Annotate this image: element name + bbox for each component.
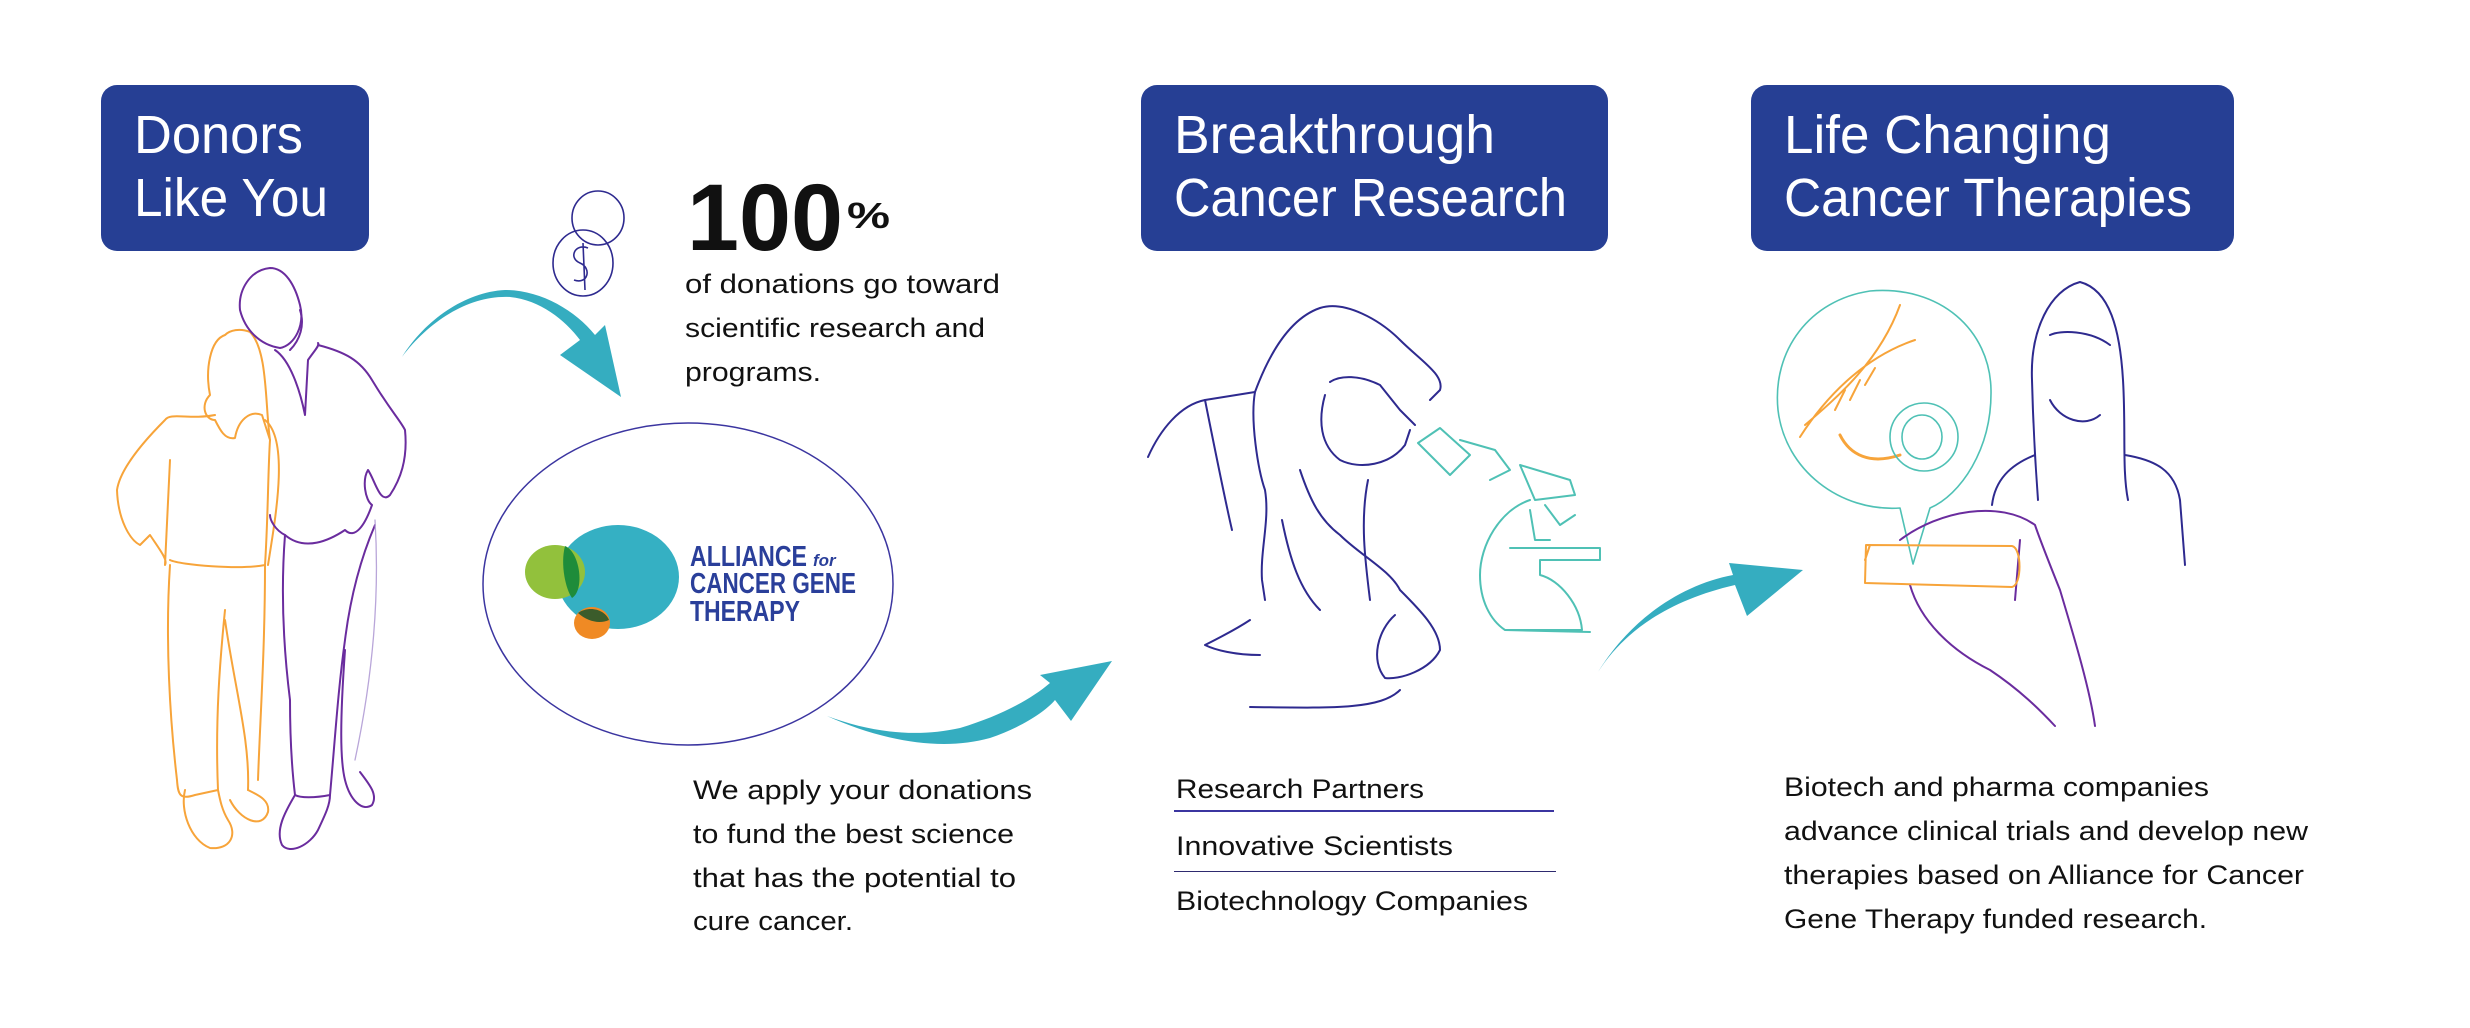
text: apply donations: cure cancer.: [693, 906, 853, 936]
heading: Life Changing Cancer Therapies: Life Changing: [1784, 105, 2111, 165]
heading: Breakthrough Cancer Research: [1141, 85, 1608, 251]
heading: Donors Like You: [101, 85, 369, 251]
arrow: research to therapies: [1598, 563, 1803, 672]
text: 100% description: scientific research and: [685, 313, 985, 343]
text: therapies description: therapies based on Alliance for Cancer: [1784, 860, 2304, 890]
heading: Donors Like You: Like You: [134, 168, 328, 228]
logo circle: Alliance for Cancer Gene Therapy: [483, 423, 893, 745]
stat: 100%: 100: [687, 165, 843, 271]
speech bubble: [1777, 290, 1991, 564]
logo text: ALLIANCE: [690, 541, 807, 573]
list: research partners: Innovative Scientists: [1176, 831, 1453, 861]
heading: Life Changing Cancer Therapies: Cancer Therapies: [1784, 168, 2192, 228]
heading: Breakthrough Cancer Research: Breakthrough: [1174, 105, 1495, 165]
text: apply donations: We apply your donations: [693, 775, 1032, 805]
text: therapies description: Gene Therapy funded research.: [1784, 904, 2207, 934]
arrow: donors to Alliance: [402, 290, 621, 397]
heading: Breakthrough Cancer Research: Cancer Research: [1174, 168, 1567, 228]
list: research partners: [1174, 774, 1556, 916]
illustration: scientist with microscope: [1148, 306, 1600, 708]
text: apply donations: [693, 775, 1032, 936]
text: therapies description: Biotech and pharma companies: [1784, 772, 2209, 802]
text: 100% description: of donations go toward: [685, 269, 1000, 299]
text: apply donations: that has the potential to: [693, 863, 1016, 893]
logo text: CANCER GENE: [690, 568, 856, 600]
list: research partners: Biotechnology Companies: [1176, 886, 1528, 916]
logo text: THERAPY: [690, 596, 800, 628]
text: therapies description: advance clinical trials and develop new: [1784, 816, 2309, 846]
illustration: donors couple: [117, 268, 406, 849]
test tube: [1865, 545, 2020, 587]
text: 100% description: [685, 269, 1000, 387]
text: therapies description: [1784, 772, 2309, 934]
text: 100% description: programs.: [685, 357, 821, 387]
list: research partners: Research Partners: [1176, 774, 1424, 804]
logo mark: [525, 525, 679, 639]
arrow: Alliance to research: [827, 661, 1112, 744]
stat: 100%: %: [847, 195, 890, 236]
icon: coins: [553, 191, 624, 296]
woman: [1992, 282, 2185, 565]
logo text: for: [813, 551, 837, 570]
illustration: patient with DNA bubble and test tube: [1777, 282, 2185, 726]
heading: Life Changing Cancer Therapies: [1751, 85, 2234, 251]
heading: Donors Like You: Donors: [134, 105, 303, 165]
text: apply donations: to fund the best science: [693, 819, 1014, 849]
logo text: [690, 541, 856, 628]
